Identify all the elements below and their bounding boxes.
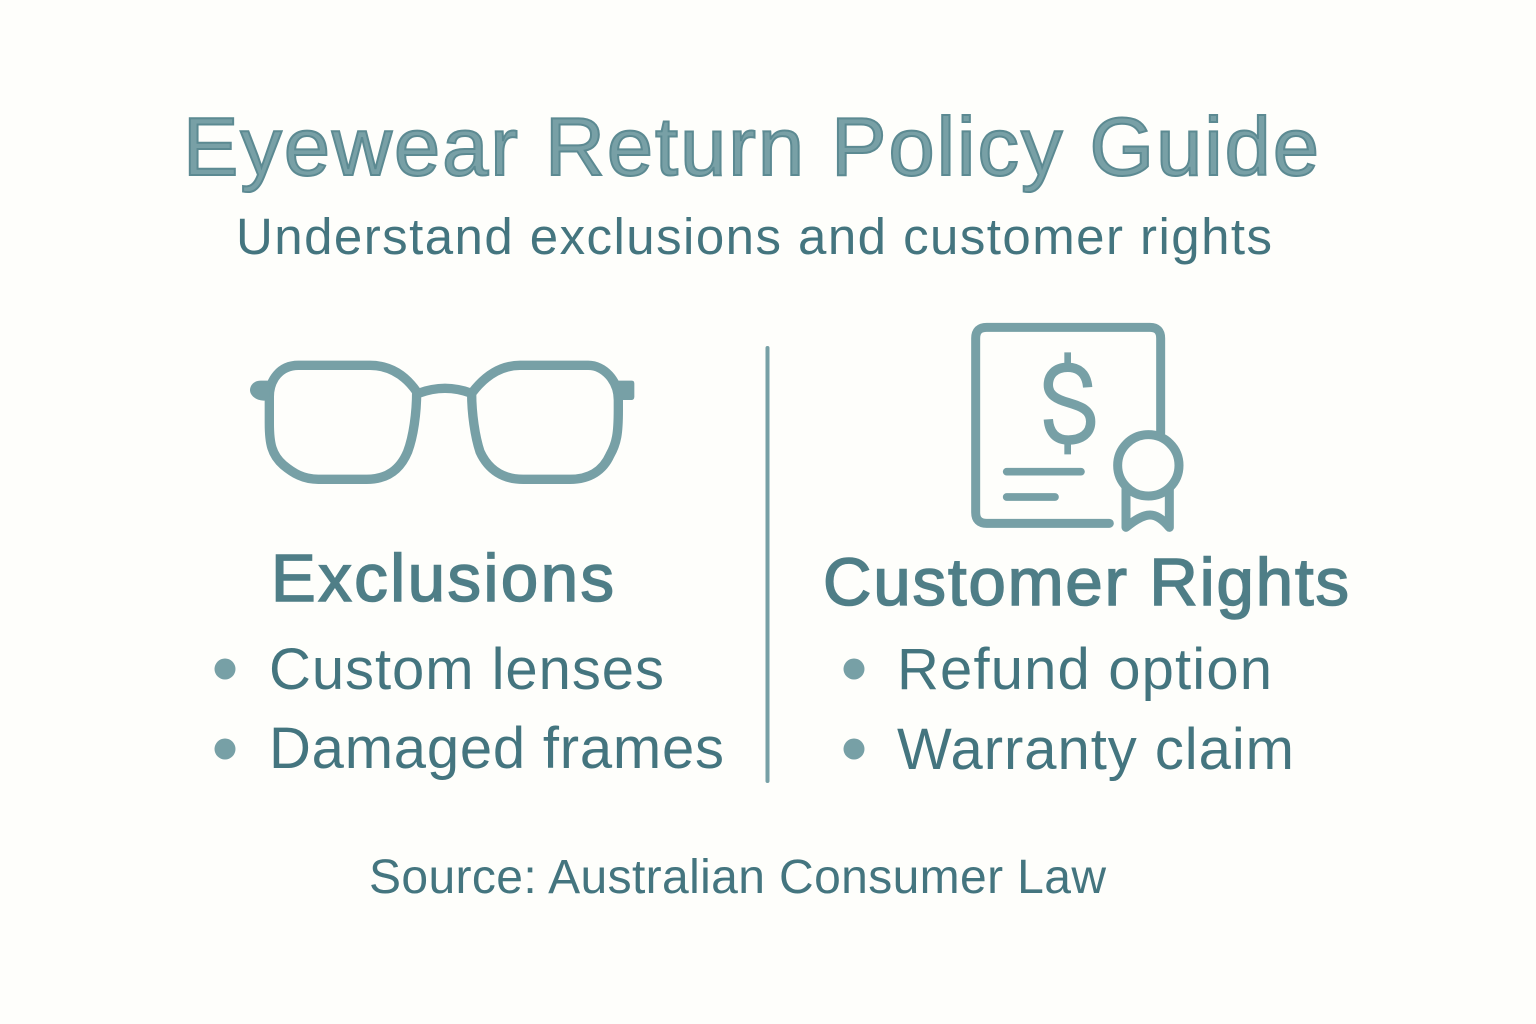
icon: glasses (250, 365, 634, 479)
document outline (976, 327, 1161, 523)
item: damaged frames: Damaged frames (269, 716, 724, 781)
left lens (269, 365, 417, 479)
bullet (214, 738, 236, 760)
seal (1118, 435, 1179, 496)
title: Eyewear Return Policy Guide (183, 100, 1319, 193)
text lines (1007, 472, 1081, 497)
ribbon (1126, 487, 1169, 527)
bullet (214, 658, 236, 680)
dollar sign (1048, 352, 1091, 454)
left temple (250, 381, 270, 401)
list: customer rights (844, 637, 1294, 782)
heading: customer rights: Customer Rights (823, 545, 1349, 620)
item: refund option: Refund option (897, 637, 1272, 702)
source note: Source: Australian Consumer Law (369, 851, 1106, 904)
panel: customer rights (823, 327, 1349, 782)
item: warranty claim: Warranty claim (897, 717, 1294, 782)
bullet (844, 738, 864, 760)
header (183, 100, 1319, 265)
list: exclusions (214, 637, 724, 781)
panel: exclusions (214, 365, 724, 781)
bridge (418, 388, 472, 393)
icon: refund certificate (976, 327, 1179, 527)
bullet (844, 658, 864, 680)
center divider (766, 346, 770, 783)
subtitle: Understand exclusions and customer rights (236, 208, 1272, 265)
heading: exclusions: Exclusions (271, 541, 614, 616)
right lens (472, 365, 618, 479)
right temple (617, 381, 634, 400)
item: custom lenses: Custom lenses (269, 637, 664, 702)
